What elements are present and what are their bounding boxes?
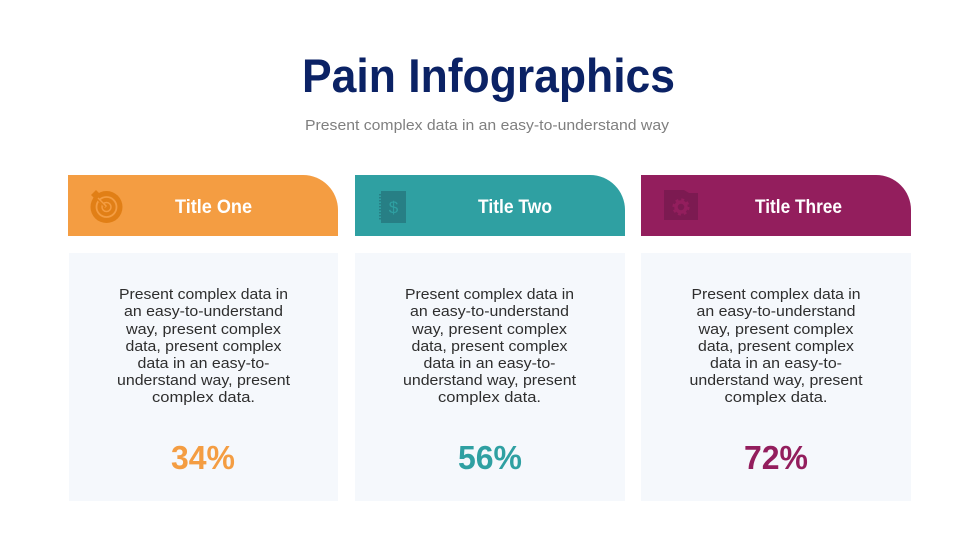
text block: title two description: way, present complex <box>411 321 568 338</box>
header: title three <box>641 175 911 236</box>
text block: title two description <box>403 286 577 406</box>
heading: title two: Title Two <box>478 197 552 218</box>
text block: title two description: an easy-to-understand <box>410 303 569 320</box>
title: Pain Infographics <box>302 49 675 102</box>
text block: title three description: data in an easy-to- <box>710 355 842 372</box>
text block: title three description <box>690 286 863 406</box>
card: title three body <box>641 253 911 501</box>
text block: title one description: way, present complex <box>125 321 282 338</box>
text block: title two description: understand way, present <box>403 372 577 389</box>
text block: title two description: data, present complex <box>412 338 568 355</box>
text block: title two description: complex data. <box>438 389 541 406</box>
card: title one body <box>69 253 338 501</box>
text block: title one description <box>117 286 291 406</box>
text block: title one description: data in an easy-to- <box>138 355 270 372</box>
icon: target with arrow <box>90 190 122 223</box>
text block: title two description: data in an easy-to- <box>424 355 556 372</box>
heading: title three: Title Three <box>755 197 842 218</box>
text block: title three description: an easy-to-understand <box>696 303 856 320</box>
icon: folder with gear <box>664 190 698 220</box>
stat: 34%: 34% <box>171 439 235 476</box>
text block: title three description: Present complex data in <box>692 286 860 303</box>
panel: title one column <box>68 175 338 501</box>
header: title one <box>68 175 338 236</box>
panel: title two column <box>355 175 625 501</box>
text block: title one description: complex data. <box>152 389 255 406</box>
text block: title three description: complex data. <box>724 389 828 406</box>
text block: title three description: data, present complex <box>698 338 855 355</box>
stat: 56%: 56% <box>458 439 522 476</box>
subtitle: Present complex data in an easy-to-understand way <box>305 117 670 134</box>
text block: title three description: understand way, present <box>690 372 863 389</box>
text block: title one description: understand way, present <box>117 372 291 389</box>
stat: 72%: 72% <box>744 439 808 476</box>
text block: title one description: data, present complex <box>126 338 282 355</box>
heading: title one: Title One <box>175 197 252 218</box>
header: title two <box>355 175 625 236</box>
icon: notebook with dollar sign: $ <box>389 198 399 217</box>
text block: title three description: way, present complex <box>697 321 854 338</box>
panel: title three column <box>641 175 911 501</box>
text block: title one description: an easy-to-understand <box>124 303 283 320</box>
text block: title one description: Present complex data in <box>119 286 288 303</box>
card: title two body <box>355 253 625 501</box>
icon: notebook with dollar sign <box>380 191 406 223</box>
text block: title two description: Present complex data in <box>405 286 574 303</box>
